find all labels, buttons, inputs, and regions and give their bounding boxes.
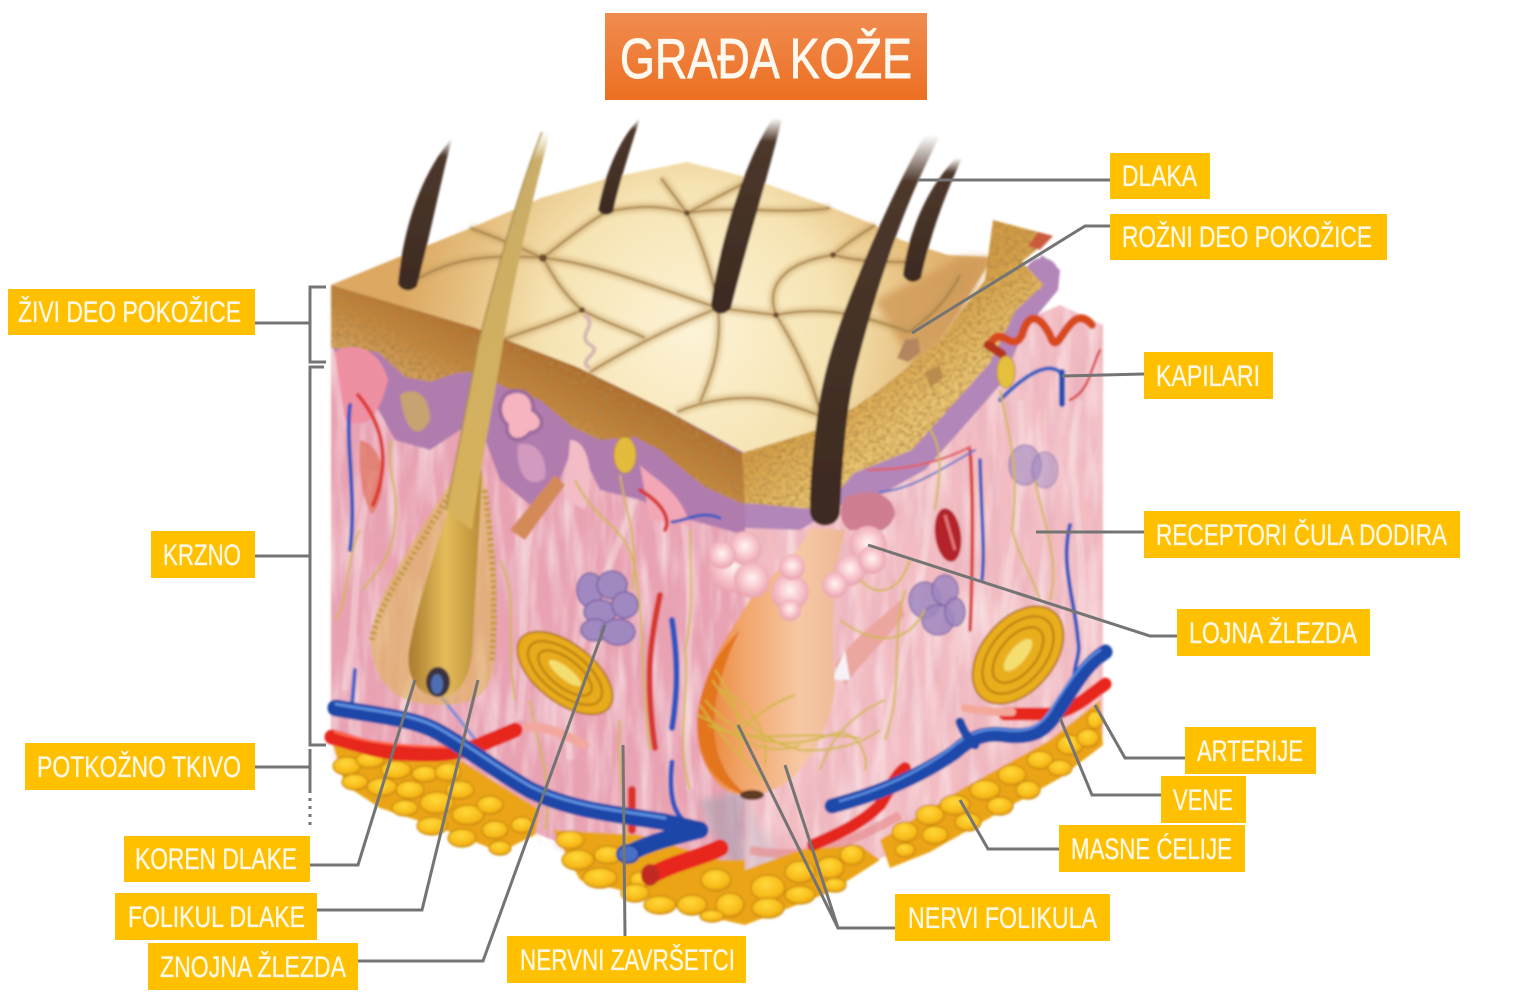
sweat pore squiggle: [584, 315, 594, 368]
label: ZNOJNA ŽLEZDA: ZNOJNA ŽLEZDA: [160, 951, 346, 984]
label: ZNOJNA ŽLEZDA: [148, 625, 605, 990]
label: ARTERIJE: ARTERIJE: [1197, 735, 1303, 768]
epidermis band, left face: [331, 285, 746, 535]
sweat glands: [577, 445, 1058, 645]
small hair follicle: [370, 470, 496, 705]
skin tag: [897, 338, 920, 362]
nerve fibres: [335, 390, 1053, 860]
label: FOLIKUL DLAKE: FOLIKUL DLAKE: [128, 901, 305, 934]
label: DLAKA: DLAKA: [1122, 160, 1197, 193]
label: RECEPTORI ČULA DODIRA: RECEPTORI ČULA DODIRA: [1156, 518, 1447, 552]
label: NERVI FOLIKULA: [738, 725, 1110, 941]
dermal papillae: [335, 347, 388, 424]
label: POTKOŽNO TKIVO: POTKOŽNO TKIVO: [37, 751, 241, 784]
label: ŽIVI DEO POKOŽICE: ŽIVI DEO POKOŽICE: [18, 296, 241, 329]
label: LOJNA ŽLEZDA: [868, 545, 1370, 656]
label: ROŽNI DEO POKOŽICE: [912, 214, 1387, 333]
label: KRZNO: [151, 531, 310, 578]
veins: [336, 372, 1105, 863]
bracket: epidermis, dermis and hypodermis ranges: [310, 287, 326, 828]
label: KAPILARI: [1062, 352, 1273, 399]
label: NERVI FOLIKULA: NERVI FOLIKULA: [908, 902, 1097, 935]
label: POTKOŽNO TKIVO: [25, 743, 310, 790]
title banner: [605, 13, 927, 100]
large hair follicle: [697, 528, 845, 800]
hair shafts: [398, 118, 962, 530]
capillaries and small vessels: [349, 350, 1100, 830]
panel: skin cross-section illustration: [331, 118, 1106, 930]
arteries: [332, 684, 1105, 886]
label: KOREN DLAKE: KOREN DLAKE: [135, 843, 297, 876]
pacinian corpuscles (touch receptors): [503, 356, 1082, 730]
arrector pili muscles: [510, 475, 905, 685]
label: FOLIKUL DLAKE: [115, 680, 478, 940]
label: ROŽNI DEO POKOŽICE: ROŽNI DEO POKOŽICE: [1122, 221, 1372, 254]
label: KOREN DLAKE: [124, 680, 415, 882]
epidermis band, right face: [742, 220, 1062, 530]
sebaceous glands: [708, 492, 895, 621]
label: KRZNO: KRZNO: [163, 539, 241, 572]
fat cells: [333, 700, 1103, 925]
dermis base: [331, 300, 1106, 930]
label: LOJNA ŽLEZDA: LOJNA ŽLEZDA: [1189, 617, 1357, 650]
wavy capillary top edge: [988, 318, 1092, 354]
label: VENE: [1060, 718, 1246, 823]
title banner: GRAĐA KOŽE: [620, 27, 912, 91]
label: NERVNI ZAVRŠETCI: [507, 745, 746, 983]
label: ŽIVI DEO POKOŽICE: [8, 289, 310, 335]
label: ARTERIJE: [1095, 705, 1316, 774]
label: MASNE ĆELIJE: [960, 800, 1245, 872]
label: VENE: VENE: [1173, 784, 1233, 817]
label: KAPILARI: KAPILARI: [1156, 360, 1260, 393]
label: NERVNI ZAVRŠETCI: NERVNI ZAVRŠETCI: [520, 943, 735, 977]
label: DLAKA: [918, 153, 1210, 199]
label: MASNE ĆELIJE: MASNE ĆELIJE: [1071, 833, 1232, 866]
top surface of the skin: [331, 162, 990, 453]
label: RECEPTORI ČULA DODIRA: [1036, 511, 1460, 558]
